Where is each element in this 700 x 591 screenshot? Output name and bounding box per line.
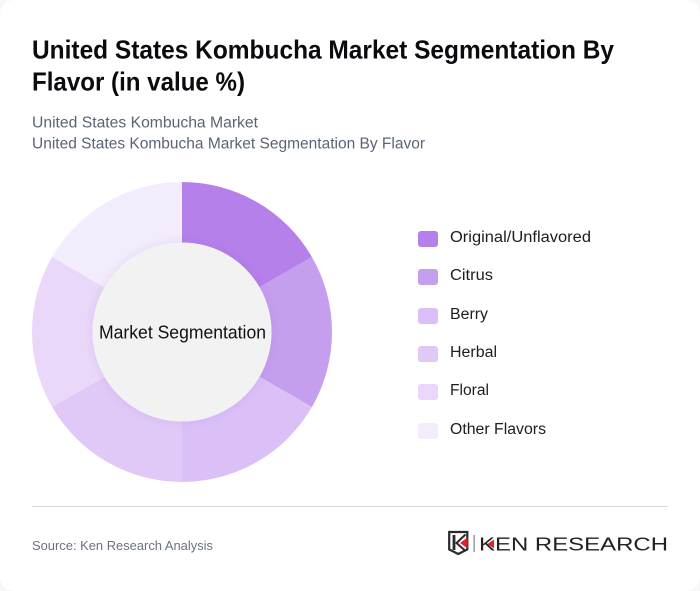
segment: Herbal: [52, 377, 182, 482]
legend item: Herbal: [418, 344, 497, 362]
legend item: Herbal: Herbal: [450, 344, 497, 361]
donut center label: Market Segmentation: [99, 322, 266, 342]
segment: Other Flavors: [52, 182, 182, 287]
legend item: Floral: Floral: [450, 382, 489, 399]
legend item: Citrus: Citrus: [450, 267, 493, 284]
donut center label: [92, 242, 272, 422]
wordmark: KEN RESEARCH: [479, 534, 668, 554]
legend item: Original/Unflavored: Original/Unflavored: [450, 229, 591, 246]
legend item: Citrus: [418, 267, 493, 285]
title: United States Kombucha Market Segmentation By: [32, 34, 615, 64]
title: [32, 34, 615, 96]
legend item: Berry: Berry: [450, 306, 488, 323]
legend item: Other Flavors: [418, 421, 546, 439]
icon: shield K: [449, 532, 468, 554]
subtitle: United States Kombucha Market: [32, 114, 259, 132]
legend: [418, 229, 591, 439]
legend item: Other Flavors: Other Flavors: [450, 421, 546, 438]
source note: Source: Ken Research Analysis: [32, 538, 213, 553]
donut chart: [32, 182, 332, 482]
legend item: Berry: [418, 306, 488, 324]
subtitle: United States Kombucha Market Segmentation By Flavor: [32, 136, 425, 152]
title: Flavor (in value %): [32, 66, 245, 96]
logo: Ken Research: [449, 532, 668, 554]
segment: Floral: [32, 257, 104, 407]
segment: Citrus: [260, 257, 332, 407]
segment: Berry: [182, 377, 312, 482]
legend item: Floral: [418, 382, 489, 400]
subtitle: [32, 114, 425, 152]
segment: Original/Unflavored: [182, 182, 312, 287]
